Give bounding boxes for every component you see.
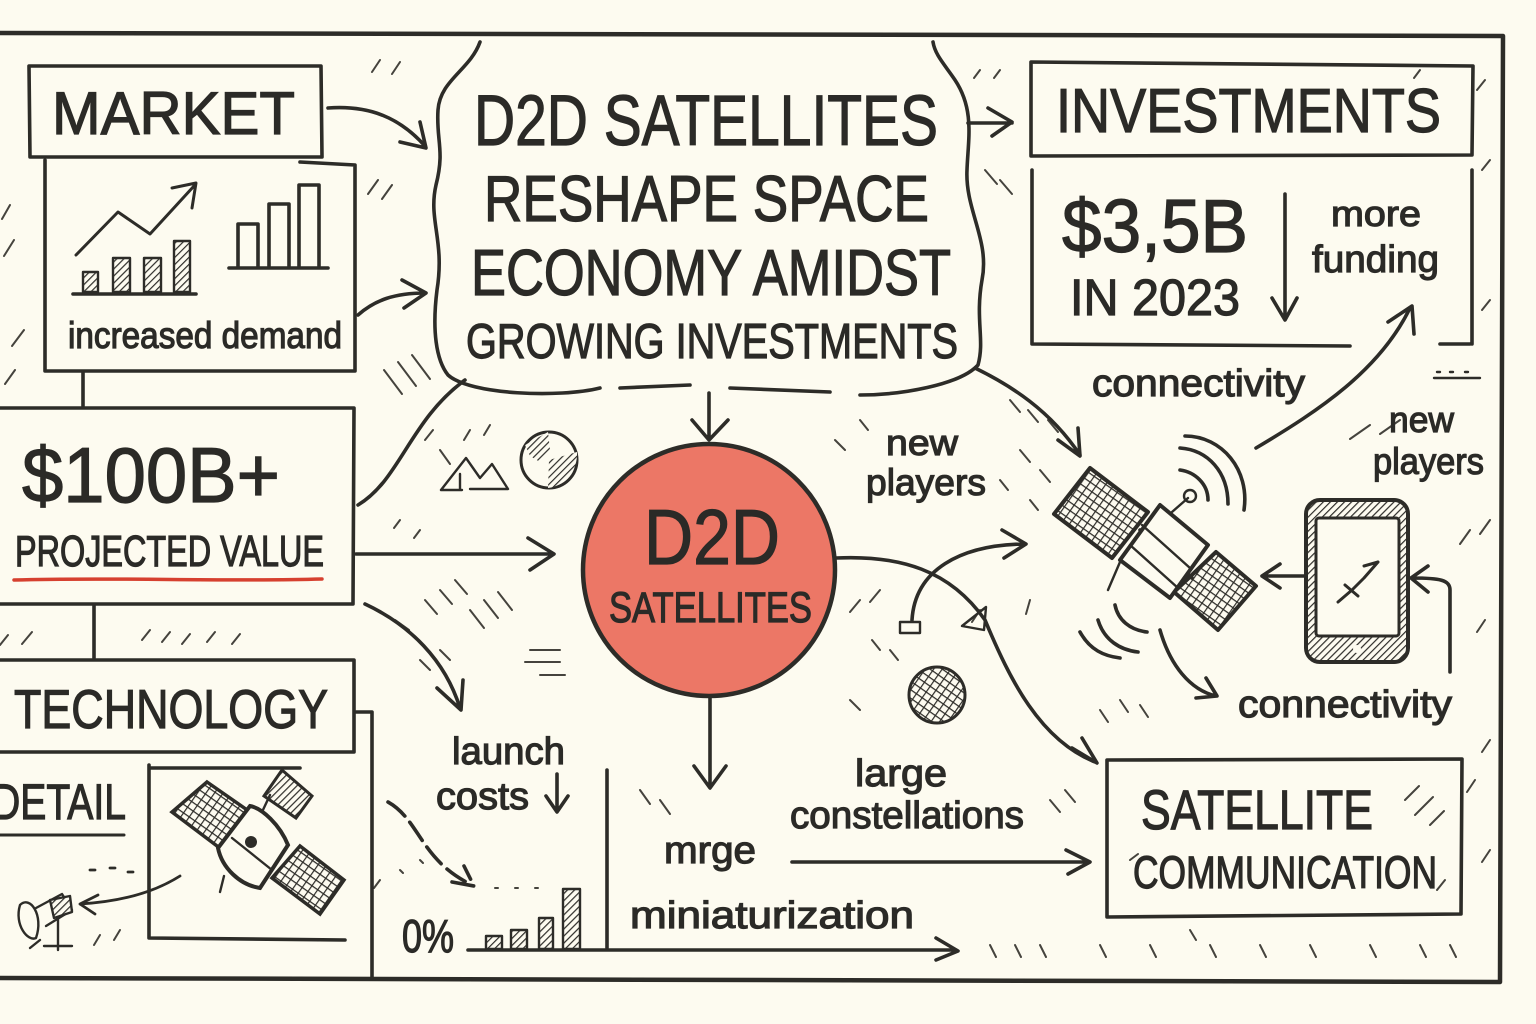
arrow: connectivity to phone — [1411, 566, 1450, 672]
heading: investments: INVESTMENTS — [1056, 77, 1441, 146]
arrow: value to circle — [356, 538, 554, 570]
arrow: to satellite communication — [792, 850, 1090, 874]
panel: projected value — [0, 408, 354, 604]
panel: satellite communication — [1107, 759, 1462, 917]
arrow: satellite to funding — [1256, 306, 1414, 448]
arrow: circle to satellite comm — [836, 558, 1097, 763]
arrow: title to circle — [692, 393, 728, 440]
arrow: title to satellite — [975, 368, 1080, 456]
arrow: satellite to connectivity — [1160, 630, 1217, 698]
panel: investments — [1031, 62, 1473, 346]
arrow: market to title — [328, 108, 426, 148]
arrow: loop to satellite — [912, 530, 1026, 620]
icon: small globe — [909, 667, 965, 723]
stat: 3.5B — [1062, 184, 1248, 326]
stat: 3.5B: $3,5B — [1062, 184, 1248, 268]
icon: mountains — [441, 458, 508, 490]
text: new players left: new — [886, 422, 959, 463]
circle: D2D satellites: SATELLITES — [609, 584, 812, 632]
arrow: baseline — [468, 938, 958, 960]
title text: D2D SATELLITES — [474, 82, 938, 161]
panel: title — [434, 42, 984, 395]
text: mrge: mrge — [664, 830, 756, 872]
text: large constellations: constellations — [790, 795, 1024, 837]
text: increased demand: increased demand — [68, 315, 342, 356]
arrow: demand to title — [358, 280, 426, 315]
stat: 3.5B: IN 2023 — [1070, 269, 1240, 326]
text: more funding — [1312, 193, 1439, 281]
icon: main satellite — [1054, 436, 1256, 658]
circle: D2D satellites: D2D — [644, 493, 780, 581]
text: zero percent: 0% — [402, 910, 454, 962]
text: launch costs: costs — [436, 776, 529, 818]
text: new players right — [1373, 399, 1484, 482]
arrow: value to title — [358, 380, 465, 505]
chart: bars — [229, 185, 328, 268]
label: projected value: PROJECTED VALUE — [15, 527, 324, 576]
text: new players left: players — [866, 462, 986, 503]
heading: market — [29, 66, 322, 157]
arrow: circle down — [694, 698, 726, 788]
text: connectivity bottom: connectivity — [1238, 684, 1452, 726]
icon: antenna — [19, 894, 72, 950]
icon: satellite small — [172, 770, 344, 914]
arrow: down — [1272, 194, 1297, 320]
text: large constellations: large — [855, 753, 947, 795]
panel: satellite communication: SATELLITE — [1141, 778, 1373, 841]
text: launch costs: launch — [452, 731, 565, 773]
text: launch costs — [436, 731, 565, 818]
arrow: title to investments — [968, 108, 1012, 136]
text: more funding: funding — [1312, 239, 1439, 281]
text: connectivity top: connectivity — [1092, 363, 1305, 405]
red underline — [14, 579, 322, 580]
title text: ECONOMY AMIDST — [471, 236, 951, 309]
panel: technology — [0, 660, 372, 978]
text: miniaturization: miniaturization — [630, 895, 914, 937]
heading: investments — [1031, 62, 1473, 156]
text: more funding: more — [1331, 193, 1421, 234]
icon: globe — [521, 432, 577, 488]
panel: market — [29, 66, 355, 371]
title text: RESHAPE SPACE — [484, 162, 929, 235]
chart: rising trend — [73, 183, 196, 294]
body — [1120, 505, 1208, 598]
heading: market: MARKET — [52, 80, 295, 147]
panel: satellite communication: COMMUNICATION — [1133, 847, 1437, 898]
text: new players right: players — [1373, 441, 1484, 482]
text: new players left — [866, 422, 986, 503]
connector — [83, 372, 94, 658]
arrow: dashed to chart — [388, 802, 474, 886]
text: new players right: new — [1389, 399, 1455, 440]
solar panel bottom — [1174, 552, 1256, 630]
icon: phone — [1306, 500, 1408, 662]
chart: small bars — [486, 889, 580, 949]
heading: technology: TECHNOLOGY — [14, 678, 328, 740]
arrow: satellite to antenna — [80, 868, 180, 914]
circle: D2D satellites — [583, 444, 835, 696]
title text: GROWING INVESTMENTS — [466, 315, 958, 369]
stat: 100B: $100B+ — [22, 431, 280, 519]
title text — [466, 82, 958, 369]
solar panel top — [1054, 468, 1148, 558]
arrow: value to launch costs — [365, 604, 463, 710]
text: large constellations — [790, 753, 1024, 837]
arrow: phone to satellite — [1262, 564, 1304, 588]
arrow: costs down — [546, 774, 568, 812]
